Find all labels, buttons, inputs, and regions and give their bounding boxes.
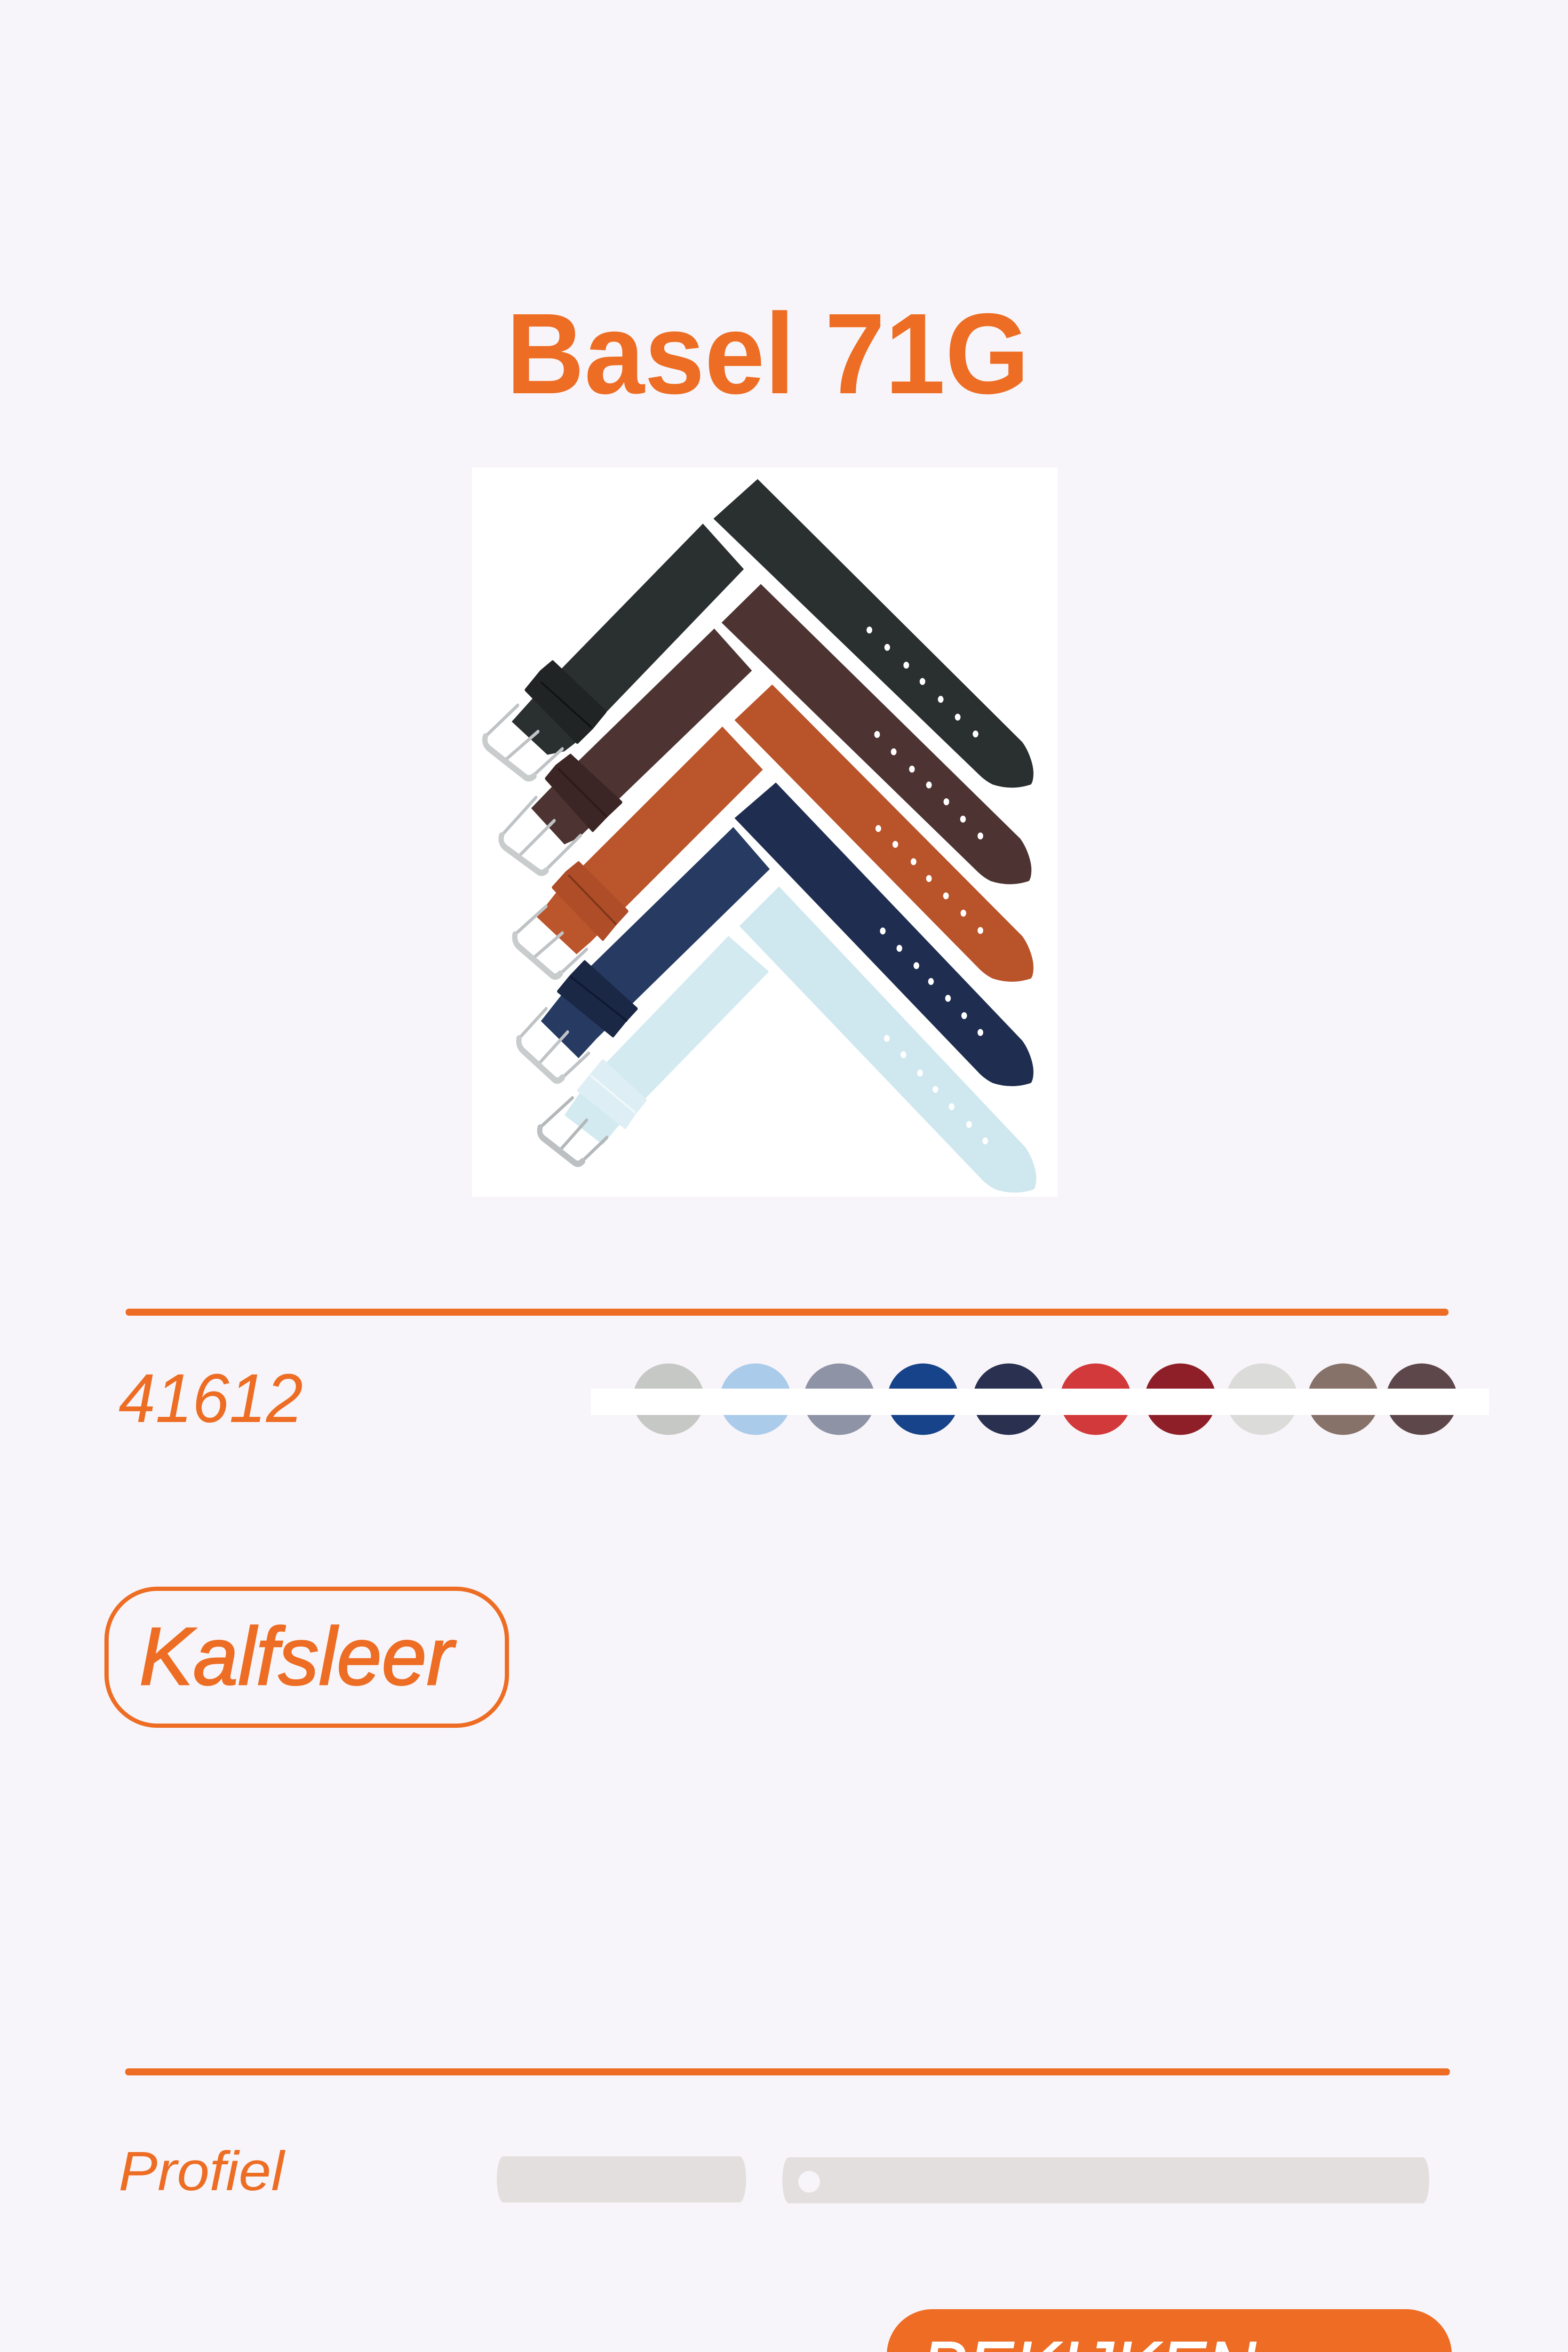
profile bar: short <box>497 2156 746 2202</box>
profile label: Profiel <box>119 2140 286 2202</box>
strap: black <box>485 479 1034 788</box>
strap: cognac <box>515 684 1034 982</box>
profile bar: long <box>782 2157 1429 2203</box>
strap: navy <box>519 782 1034 1086</box>
product photo: watch straps <box>472 468 1058 1197</box>
material tag: Kalfsleer <box>139 1610 456 1702</box>
title: Basel 71G <box>506 289 1029 418</box>
strap: pale blue <box>540 886 1036 1192</box>
material tag <box>106 1589 507 1725</box>
button <box>887 2309 1452 2352</box>
colour swatches <box>591 1363 1489 1435</box>
article number: 41612 <box>119 1360 303 1437</box>
strap: brown <box>501 584 1031 884</box>
